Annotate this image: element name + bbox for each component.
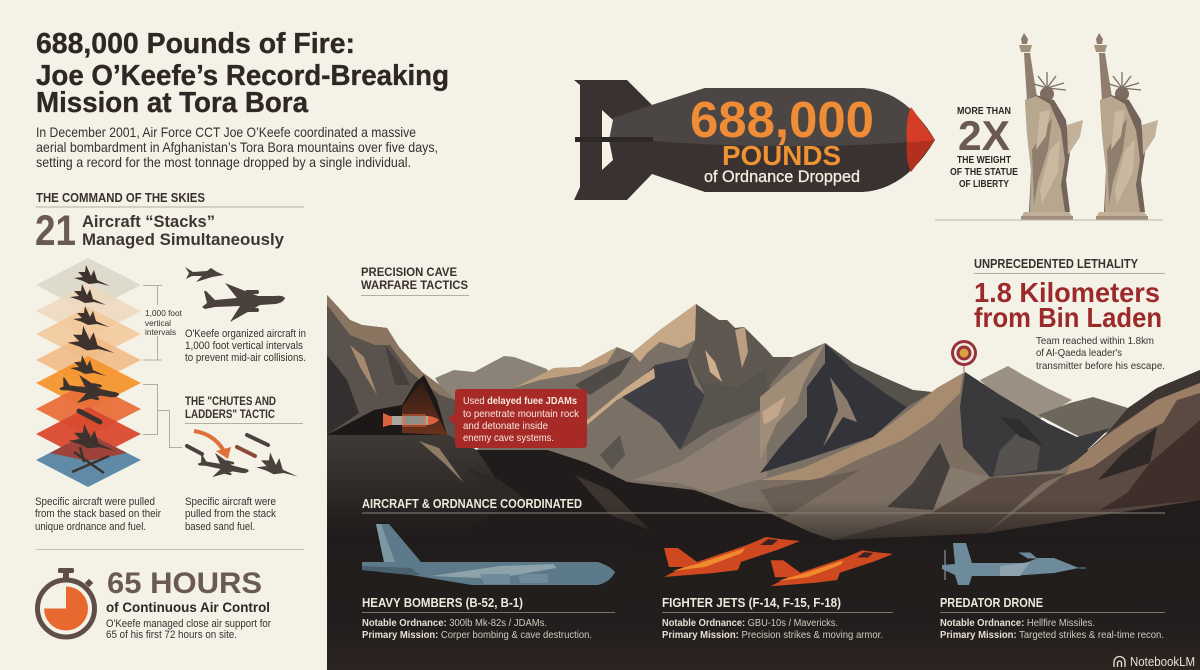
mountain landscape: [327, 295, 1200, 670]
text: transmitter: [1036, 335, 1165, 372]
stat: 688,000 pounds: 688,000: [690, 91, 874, 148]
heading: UNPRECEDENTED LETHALITY: [974, 257, 1139, 271]
title: 688,000 Pounds of Fire:: [36, 28, 355, 60]
text: transmitter: of Al-Qaeda leader's: [1036, 347, 1122, 359]
specs: Notable Ordnance: Hellfire Missiles.: [940, 618, 1095, 629]
specs: [940, 618, 1164, 641]
bottom fade: [327, 500, 1200, 545]
connector: chutes and ladders bracket: [143, 384, 182, 448]
text: pulled by sand fuel: pulled from the stack: [185, 508, 276, 520]
text: close air support: 65 of his first 72 hours on site.: [106, 629, 237, 641]
label: HEAVY BOMBERS (B-52, B-1): [362, 596, 523, 610]
panel: aircraft and ordnance: [362, 497, 1165, 641]
text: more than 2x the weight: OF LIBERTY: [959, 178, 1009, 190]
left mountain: [327, 295, 470, 440]
text: close air support: O'Keefe managed close air support for: [106, 618, 271, 630]
stat: 21 aircraft stacks: Aircraft “Stacks”: [82, 212, 215, 231]
section heading: THE COMMAND OF THE SKIES: [36, 191, 205, 205]
text: pulled by ordnance: unique ordnance and fuel.: [35, 521, 146, 533]
intro paragraph: [36, 124, 438, 170]
heading: precision cave warfare: [361, 265, 469, 296]
card: predator drone: [940, 543, 1165, 641]
text: more than 2x the weight: [950, 105, 1018, 190]
bracket: 1,000 foot vertical intervals: [143, 286, 184, 360]
illustration: aircraft pulled from stack: [187, 431, 298, 485]
heading: AIRCRAFT & ORDNANCE COORDINATED: [362, 497, 582, 511]
stat: 688,000 pounds: POUNDS: [722, 140, 841, 171]
stat: 1.8 kilometers: 1.8 Kilometers: [974, 277, 1160, 308]
central mountain: [477, 304, 960, 515]
icon: stopwatch: [38, 568, 94, 637]
text: pulled by sand fuel: [185, 496, 276, 533]
text: more than 2x the weight: 2X: [958, 112, 1010, 159]
icon: small drone: [185, 267, 224, 282]
back hills: [435, 356, 560, 410]
heading: precision cave warfare: PRECISION CAVE: [361, 265, 457, 279]
foreground ridge: [327, 430, 560, 530]
specs: [662, 618, 883, 641]
panel: command of the skies: [35, 191, 306, 533]
comparison: 2X statue of liberty: [935, 33, 1163, 220]
text: close air support: [106, 618, 271, 641]
text: vertical intervals: [185, 328, 306, 364]
text: vertical intervals: 1,000 foot vertical intervals: [185, 340, 303, 352]
stat: 688,000 pounds: [690, 91, 874, 186]
subheading: of Continuous Air Control: [106, 599, 270, 615]
stat: 65 hours: 65 HOURS: [107, 567, 262, 600]
text: vertical intervals: to prevent mid-air collisions.: [185, 352, 306, 364]
title: Joe O’Keefe’s Record-Breaking: [36, 60, 449, 92]
stat: 688,000 pounds: of Ordnance Dropped: [704, 167, 860, 186]
callout: delayed fuse JDAMs: and detonate inside: [463, 420, 548, 432]
callout: delayed fuse JDAMs: to penetrate mountain rock: [463, 408, 580, 420]
text: pulled by sand fuel: Specific aircraft were: [185, 496, 276, 508]
text: pulled by sand fuel: based sand fuel.: [185, 521, 255, 533]
specs: Notable Ordnance: 300lb Mk-82s / JDAMs.: [362, 618, 547, 629]
text: pulled by ordnance: from the stack based on their: [35, 508, 161, 520]
text: transmitter: transmitter before his escape.: [1036, 360, 1165, 372]
right mountain: [987, 370, 1200, 533]
watermark: NotebookLM: NotebookLM: [1130, 655, 1195, 669]
stat: 21 aircraft stacks: Managed Simultaneously: [82, 230, 285, 249]
callout: delayed fuse JDAMs: Used delayed fuee JDAMs: [463, 395, 577, 407]
icon: bomb in cave: [383, 413, 439, 427]
text: more than 2x the weight: MORE THAN: [957, 105, 1011, 117]
stat: 21 aircraft stacks: [35, 207, 285, 255]
callout: delayed fuse JDAMs: [448, 389, 587, 448]
stat: 1.8 kilometers: [974, 277, 1162, 333]
icon: drone: [942, 543, 1086, 585]
text: pulled by ordnance: Specific aircraft were pulled: [35, 496, 155, 508]
specs: Notable Ordnance: GBU-10s / Mavericks.: [662, 618, 838, 629]
illustration: cave with bomb: [327, 375, 447, 435]
heading: precision cave warfare: WARFARE TACTICS: [361, 278, 468, 292]
callout: delayed fuse JDAMs: enemy cave systems.: [463, 432, 554, 444]
card: fighter jets: [662, 537, 893, 641]
label: FIGHTER JETS (F-14, F-15, F-18): [662, 596, 841, 610]
intro paragraph: In December 2001, Air Force CCT Joe O’Keefe coordinated a massive: [36, 124, 416, 140]
specs: Primary Mission: Targeted strikes & real-time recon.: [940, 630, 1164, 641]
text: pulled by ordnance: [35, 496, 161, 533]
card: heavy bombers: [362, 524, 615, 641]
icon: bomb with headline stat: [574, 80, 935, 200]
title: [36, 28, 449, 119]
stacked altitude diamonds with aircraft: [36, 258, 141, 487]
icon: statue of liberty left: [1019, 33, 1083, 220]
icon: B-52 bomber: [362, 524, 615, 585]
specs: [362, 618, 592, 641]
specs: Primary Mission: Corper bombing & cave destruction.: [362, 630, 592, 641]
panel: 65 hours: [38, 567, 271, 641]
title: Mission at Tora Bora: [36, 87, 309, 119]
bracket: 1,000 foot vertical intervals: intervals: [145, 327, 176, 337]
heading: chutes and ladders: LADDERS" TACTIC: [185, 407, 275, 421]
text: transmitter: Team reached within 1.8km: [1036, 335, 1154, 347]
heading: chutes and ladders: [185, 394, 303, 424]
stat: 21 aircraft stacks: 21: [35, 207, 76, 255]
panel: unprecedented lethality: [951, 257, 1165, 372]
bracket: 1,000 foot vertical intervals: vertical: [145, 318, 171, 328]
base dark ground: [327, 450, 1200, 670]
stat: 1.8 kilometers: from Bin Laden: [974, 302, 1162, 333]
text: more than 2x the weight: OF THE STATUE: [950, 166, 1018, 178]
intro paragraph: aerial bombardment in Afghanistan’s Tora Bora mountains over five days,: [36, 139, 438, 155]
text: vertical intervals: O'Keefe organized aircraft in: [185, 328, 306, 340]
heading: chutes and ladders: THE "CHUTES AND: [185, 394, 276, 408]
label: PREDATOR DRONE: [940, 596, 1043, 610]
target mountain: [760, 372, 1077, 540]
bracket: 1,000 foot vertical intervals: 1,000 foot: [145, 308, 183, 318]
icon: statue of liberty right: [1094, 33, 1158, 220]
icon: target marker: [951, 340, 977, 372]
icon: two fighter jets: [664, 537, 893, 586]
text: more than 2x the weight: THE WEIGHT: [957, 154, 1011, 166]
intro paragraph: setting a record for the most tonnage dropped by a single individual.: [36, 154, 411, 170]
specs: Primary Mission: Precision strikes & moving armor.: [662, 630, 883, 641]
icon: large bomber: [202, 283, 285, 322]
